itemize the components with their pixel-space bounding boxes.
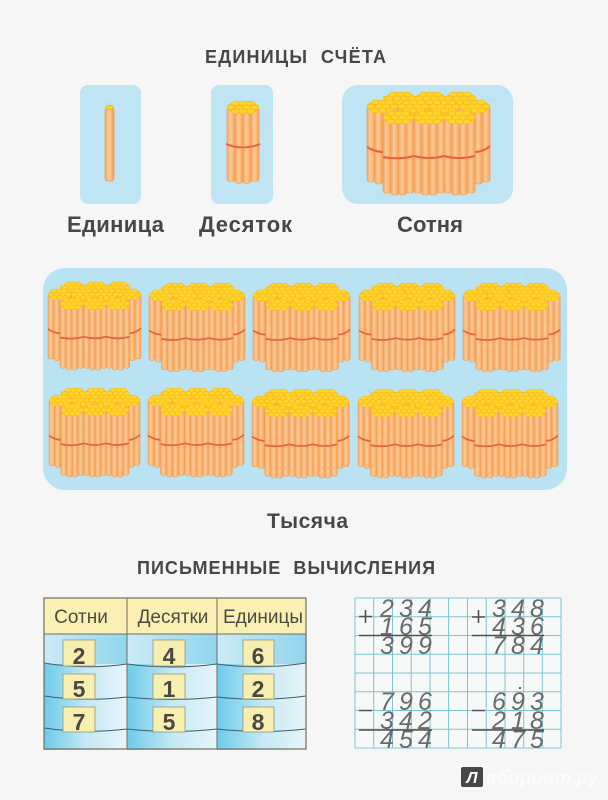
subtraction 796 - 342: 4 — [418, 726, 432, 754]
icon: bundle of ten rods — [226, 101, 260, 183]
table body cells — [44, 634, 306, 750]
bundle 2 — [149, 283, 245, 372]
label: ten: Десяток — [199, 212, 293, 237]
icon: single rod — [105, 105, 114, 181]
subtraction 693 - 218: 7 — [511, 726, 526, 754]
bundle 4 — [359, 283, 455, 372]
number boxes: 5 — [73, 676, 86, 702]
addition 348 + 436 — [472, 595, 544, 660]
addition 234 + 165: 6 — [399, 613, 413, 641]
addition 234 + 165: 4 — [418, 595, 432, 623]
icon: bundle of one hundred rods — [367, 92, 490, 195]
addition 348 + 436: 3 — [492, 595, 506, 623]
subtraction 693 - 218: 3 — [530, 688, 544, 716]
subtraction 693 - 218: 6 — [492, 688, 506, 716]
number boxes: 1 — [163, 676, 176, 702]
table header: Десятки — [138, 607, 208, 628]
addition 348 + 436: 7 — [492, 632, 507, 660]
bundle 7 — [148, 388, 244, 477]
addition 348 + 436: 8 — [511, 632, 525, 660]
subtraction 796 - 342: 6 — [418, 688, 432, 716]
bundle 9 — [358, 389, 454, 478]
bundle 5 — [463, 283, 560, 372]
table header — [44, 598, 306, 634]
place value table — [44, 598, 306, 750]
addition 234 + 165: 2 — [379, 595, 394, 623]
subtraction 693 - 218: 5 — [530, 726, 544, 754]
subtraction 796 - 342: 4 — [380, 726, 394, 754]
panel: ten — [211, 85, 273, 204]
addition 348 + 436: 8 — [530, 595, 544, 623]
subtraction 693 - 218: 9 — [511, 688, 525, 716]
addition 234 + 165: 5 — [418, 613, 432, 641]
subtraction 796 - 342: 3 — [380, 707, 394, 735]
panel: single unit — [80, 85, 141, 204]
addition 234 + 165: 9 — [418, 632, 432, 660]
bundle 8 — [252, 389, 349, 478]
label: hundred: Сотня — [397, 212, 463, 237]
subtraction 693 - 218: 4 — [492, 726, 506, 754]
addition 348 + 436: 4 — [511, 595, 525, 623]
label: thousand: Тысяча — [267, 510, 348, 533]
addition 234 + 165: 1 — [380, 613, 394, 641]
subtraction 693 - 218 — [472, 687, 544, 754]
label: unit: Единица — [67, 212, 165, 237]
number boxes: 8 — [252, 709, 265, 735]
addition 348 + 436: 4 — [492, 613, 506, 641]
watermark logo: абиринт.ру — [486, 768, 600, 789]
addition 348 + 436: 4 — [530, 632, 544, 660]
grid with column calculations — [355, 595, 561, 754]
subtraction 796 - 342: 9 — [399, 688, 413, 716]
bundle 10 — [462, 389, 558, 478]
subtraction 796 - 342 — [359, 688, 432, 754]
subtraction 693 - 218: 2 — [491, 707, 506, 735]
bundle 3 — [253, 283, 350, 372]
number boxes: 6 — [252, 643, 264, 669]
table header: Единицы — [223, 607, 303, 628]
number boxes: 5 — [163, 709, 176, 735]
heading: units of counting: ЕДИНИЦЫ СЧЁТА — [205, 47, 386, 67]
number boxes — [63, 640, 274, 735]
panel: hundred — [342, 85, 513, 204]
subtraction 796 - 342: 2 — [417, 707, 432, 735]
subtraction 796 - 342: 4 — [399, 707, 413, 735]
subtraction 796 - 342: 7 — [380, 688, 395, 716]
bundle 1 — [48, 282, 141, 370]
addition 348 + 436: 6 — [530, 613, 544, 641]
subtraction 796 - 342: 5 — [399, 726, 413, 754]
subtraction 693 - 218: 1 — [511, 707, 525, 735]
number boxes: 2 — [73, 643, 85, 669]
table header: Сотни — [54, 607, 108, 628]
bundle 6 — [49, 388, 140, 477]
addition 348 + 436: 3 — [511, 613, 525, 641]
addition 234 + 165: 3 — [399, 595, 413, 623]
number boxes: 4 — [163, 643, 176, 669]
watermark logo: Л — [466, 770, 478, 787]
number boxes: 7 — [73, 709, 85, 735]
panel: thousand — [43, 268, 567, 490]
subtraction 693 - 218: 8 — [530, 707, 544, 735]
addition 234 + 165: 3 — [380, 632, 394, 660]
addition 234 + 165 — [359, 595, 432, 660]
number boxes: 2 — [252, 676, 264, 702]
heading: written calculations: ПИСЬМЕННЫЕ ВЫЧИСЛЕНИЯ — [137, 558, 435, 578]
addition 234 + 165: 9 — [399, 632, 413, 660]
